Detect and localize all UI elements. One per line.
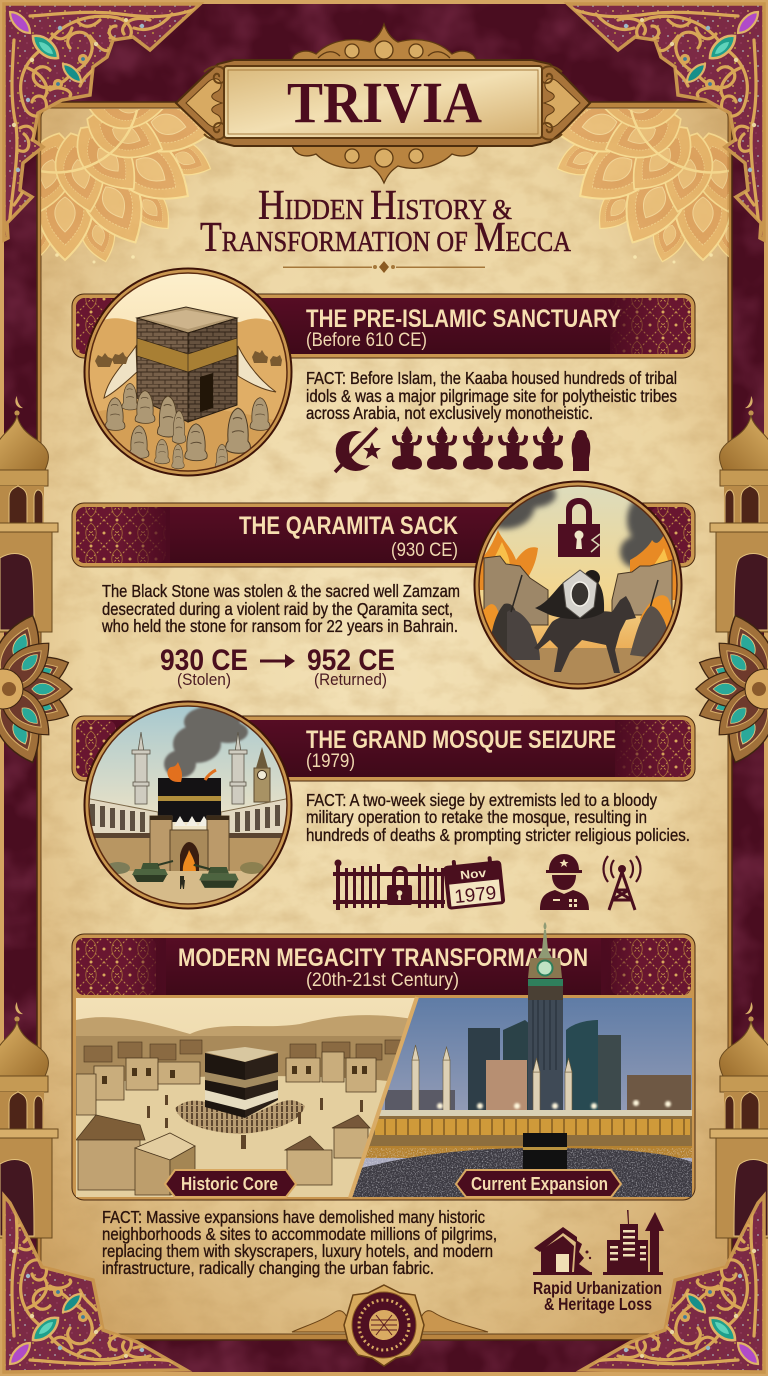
image: current expansion — [345, 995, 693, 1198]
minarets and side rosettes right — [693, 396, 768, 1238]
label pill: current expansion: Current Expansion — [471, 1174, 608, 1194]
fact text: who held the stone for ransom for 22 years in Bahrain. — [101, 616, 458, 636]
arrow — [260, 654, 295, 668]
icon: crossed-out crescent — [335, 428, 381, 472]
timeline: 952 CE — [307, 644, 395, 677]
date: (930 CE) — [391, 540, 458, 561]
banner — [72, 294, 695, 358]
divider — [283, 261, 485, 273]
icon: broken lock — [558, 498, 600, 557]
date: (Before 610 CE) — [306, 330, 427, 351]
slanted divider — [350, 997, 417, 1198]
label pill: current expansion — [456, 1170, 621, 1197]
fact text: FACT: Massive expansions have demolished many historic — [102, 1207, 485, 1227]
fact text: hundreds of deaths & prompting stricter religious policies. — [306, 825, 690, 845]
banner — [72, 934, 695, 1200]
bottom seal — [292, 1285, 488, 1366]
clock tower overlapping banner — [528, 922, 563, 1000]
corner ornament top-right — [568, 4, 764, 240]
banner — [72, 503, 695, 567]
icon: calendar nov 1979 — [443, 855, 505, 910]
icon: radio tower — [604, 856, 640, 910]
icon: crumbling house — [533, 1227, 592, 1275]
subtitle: HIDDEN HISTORY & — [258, 183, 512, 229]
icon: locked gate — [333, 860, 445, 910]
fact text: idols & was a major pilgrimage site for polytheistic tribes — [306, 386, 677, 406]
fact text: The Black Stone was stolen & the sacred well Zamzam — [102, 581, 460, 601]
label pill: historic core: Historic Core — [181, 1174, 278, 1194]
icon: calendar nov 1979: Nov — [460, 866, 487, 882]
medallion: kaaba with idols — [84, 268, 292, 476]
fact text: across Arabia, not exclusively monotheistic. — [306, 403, 593, 423]
caption: Rapid Urbanization — [533, 1278, 662, 1298]
timeline: 930 CE — [160, 644, 248, 677]
mandala left — [41, 109, 212, 264]
medallion: raid and black stone — [474, 481, 683, 690]
image: historic core — [76, 998, 421, 1198]
date: (20th-21st Century) — [306, 970, 459, 991]
plaque body — [176, 60, 590, 146]
panel: grand mosque seizure — [72, 702, 695, 911]
minarets and side rosettes left — [0, 396, 75, 1238]
title: TRIVIA — [287, 70, 482, 135]
caption — [533, 1278, 662, 1314]
fact text — [102, 1207, 497, 1278]
corner ornament bottom-left — [4, 1144, 196, 1372]
fact text: replacing them with skyscrapers, luxury hotels, and modern — [102, 1241, 493, 1261]
icons: tribal idols — [392, 426, 590, 471]
fact text: military operation to retake the mosque, resulting in — [306, 807, 647, 827]
icon: skyscraper with arrow — [603, 1210, 664, 1275]
label pill: historic core — [165, 1170, 296, 1197]
medallion: siege — [84, 702, 292, 911]
heading: THE QARAMITA SACK — [239, 512, 458, 540]
panel: pre-islamic sanctuary — [72, 268, 695, 476]
corner ornament top-left — [4, 4, 200, 240]
bottom scroll ornament — [292, 146, 478, 183]
heading: THE PRE-ISLAMIC SANCTUARY — [306, 305, 621, 333]
icon: soldier — [540, 854, 589, 910]
fact text: desecrated during a violent raid by the Qaramita sect, — [102, 599, 453, 619]
fact text: FACT: Before Islam, the Kaaba housed hundreds of tribal — [306, 368, 677, 388]
subtitle: TRANSFORMATION OF MECCA — [200, 215, 571, 261]
fact text — [306, 790, 690, 845]
subtitle — [200, 183, 571, 261]
heading: THE GRAND MOSQUE SEIZURE — [306, 726, 616, 754]
caption: & Heritage Loss — [544, 1294, 652, 1314]
timeline — [160, 644, 395, 689]
top scroll ornament — [292, 24, 476, 60]
heading: MODERN MEGACITY TRANSFORMATION — [178, 944, 588, 972]
title plaque — [176, 24, 590, 183]
panel: modern megacity — [72, 922, 695, 1314]
date: (1979) — [306, 751, 355, 772]
icon: calendar nov 1979: 1979 — [453, 883, 497, 908]
fact text: infrastructure, radically changing the urban fabric. — [102, 1258, 434, 1278]
corner ornament bottom-right — [572, 1144, 764, 1372]
fact text — [306, 368, 677, 423]
timeline: (Stolen) — [177, 670, 231, 689]
fact text: neighborhoods & sites to accommodate millions of pilgrims, — [102, 1224, 497, 1244]
mandala right — [557, 109, 729, 264]
fact text — [101, 581, 460, 636]
banner — [72, 716, 695, 781]
timeline: (Returned) — [314, 670, 387, 689]
panel: qaramita sack — [72, 481, 695, 690]
fact text: FACT: A two-week siege by extremists led to a bloody — [306, 790, 657, 810]
